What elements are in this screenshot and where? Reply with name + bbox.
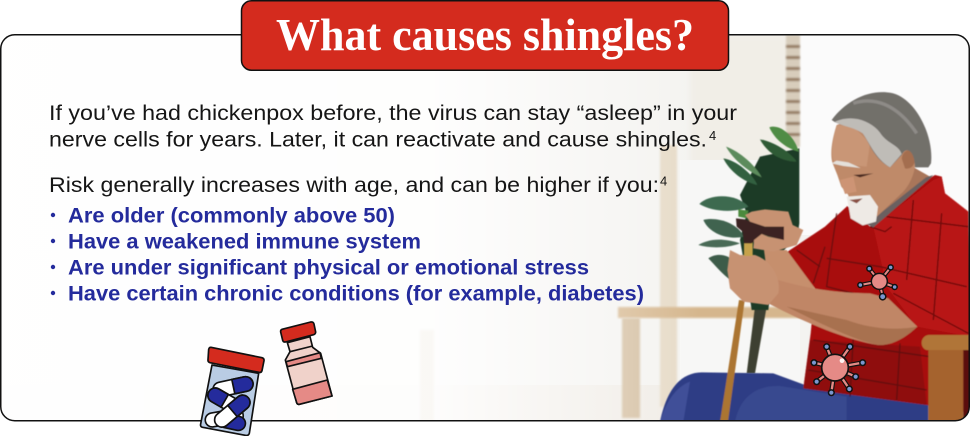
intro paragraph [49, 102, 737, 152]
face [831, 115, 915, 220]
risk factor list: Are older (commonly above 50) [68, 204, 395, 228]
beard [847, 195, 878, 225]
white fade overlay [0, 35, 700, 421]
shirt [785, 175, 970, 413]
chair arm [922, 335, 970, 350]
intro paragraph: If you’ve had chickenpox before, the virus can stay “asleep” in your [49, 102, 737, 125]
intro paragraph: 4 [709, 128, 716, 143]
forearm lower [768, 277, 917, 345]
virus large [811, 344, 865, 395]
photo background room [421, 36, 812, 420]
cane handle [736, 218, 793, 243]
virus small [858, 265, 897, 300]
eyebrow [832, 161, 861, 168]
neck [881, 168, 930, 213]
risk intro line: Risk generally increases with age, and can be higher if you: [49, 174, 659, 197]
risk factor list: Have a weakened immune system [68, 230, 421, 254]
risk intro line: 4 [660, 174, 667, 188]
trousers [660, 372, 928, 422]
icon: medicine vial [281, 322, 332, 404]
risk factor list [51, 204, 644, 306]
title banner: What causes shingles? [276, 9, 694, 60]
risk factor list: Have certain chronic conditions (for example, diabetes) [68, 282, 644, 306]
cane ferrule [744, 243, 753, 256]
plant [698, 127, 799, 373]
title banner [242, 1, 728, 70]
hair [832, 92, 931, 167]
lower hand [727, 250, 779, 305]
forearm upper [764, 250, 815, 288]
cane shaft [720, 300, 745, 422]
risk factor list: Are under significant physical or emotional stress [68, 256, 589, 280]
icon: pill jar [201, 347, 264, 435]
man with cane [660, 92, 970, 422]
intro paragraph: nerve cells for years. Later, it can reactivate and cause shingles. [49, 128, 707, 152]
upper hand [745, 209, 803, 252]
